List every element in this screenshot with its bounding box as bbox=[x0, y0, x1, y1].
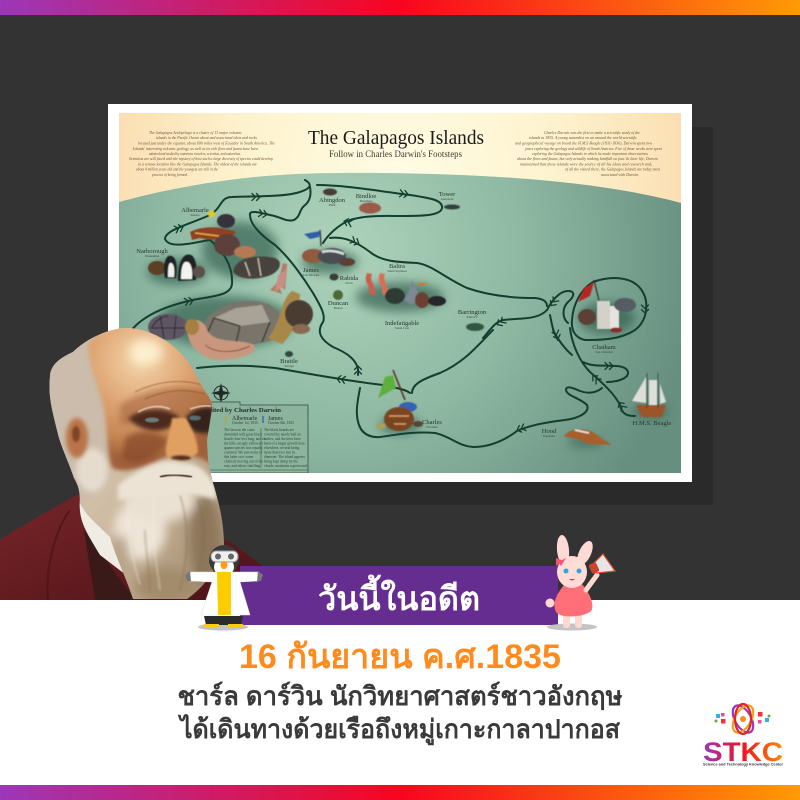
left intro paragraph bbox=[129, 130, 275, 177]
description line 2: ได้เดินทางด้วยเรือถึงหมู่เกาะกาลาปากอส bbox=[177, 713, 620, 746]
island labels: Floreana bbox=[426, 425, 438, 429]
island labels bbox=[136, 191, 671, 438]
island labels: H.M.S. Beagle bbox=[633, 420, 671, 427]
top gradient bar bbox=[0, 0, 800, 15]
island labels: Fernandina bbox=[145, 254, 160, 258]
island labels: Chatham bbox=[592, 344, 616, 351]
forehead wrinkles bbox=[135, 381, 205, 399]
right intro paragraph: about the flora and fauna, but only actually making landfall on four. In later life, Darwin bbox=[517, 156, 658, 162]
shadow bbox=[547, 624, 597, 630]
island labels: Albemarle bbox=[181, 207, 209, 214]
banner title: วันนี้ในอดีต bbox=[318, 574, 480, 617]
legend column: Albemarle bbox=[224, 416, 266, 469]
legend column: James: more than two feet in bbox=[264, 450, 295, 454]
island labels: Abingdon bbox=[319, 197, 346, 204]
shadow bbox=[198, 624, 248, 630]
animals: James island with blue flag bbox=[302, 230, 355, 266]
left intro paragraph: The Galapagos Archipelago is a cluster of 13 major volcanic bbox=[149, 130, 242, 135]
white hair bbox=[50, 334, 106, 504]
cheek shading bbox=[122, 431, 168, 462]
left intro paragraph: islands in the Pacific Ocean about and associated islets and rocks bbox=[156, 135, 257, 140]
mouth bbox=[160, 475, 192, 477]
animals: Chatham with red flag bbox=[578, 280, 636, 332]
legend column: Albemarle: this latter sort: some bbox=[224, 455, 254, 459]
arms bbox=[586, 575, 597, 590]
legend column: Albemarle: abounded with great black bbox=[224, 432, 262, 436]
island labels: Marchena bbox=[360, 199, 373, 203]
legend column: Albemarle: the hills, an ugly yellowish bbox=[224, 442, 263, 446]
legend column: Albemarle: clumsily moving out of the bbox=[224, 460, 263, 464]
island labels: Hood bbox=[542, 428, 557, 435]
hair highlight near neck bbox=[76, 448, 108, 492]
island labels: Isabela bbox=[190, 213, 200, 217]
right intro paragraph: islands in 1835. A young naturalist on an around the world scientific bbox=[529, 135, 637, 140]
eyes and brows bbox=[128, 406, 214, 434]
island labels: Rabida bbox=[340, 275, 358, 282]
animals: big tortoises, iguana and sea lion cluster bbox=[148, 263, 313, 360]
island labels: San Salvador bbox=[303, 273, 320, 277]
legend column: Albemarle: lizards four feet long, and on bbox=[224, 437, 266, 442]
beard shading bbox=[110, 492, 224, 599]
white collar bbox=[80, 498, 130, 578]
head and beard bbox=[49, 328, 224, 599]
island labels: Tower bbox=[439, 191, 456, 198]
animals: Charles turtle with green flag bbox=[376, 370, 423, 431]
purple banner bbox=[240, 566, 558, 625]
ear bbox=[66, 418, 88, 458]
date heading: 16 กันยายน ค.ศ.1835 bbox=[239, 638, 561, 676]
voyage route lines bbox=[128, 180, 646, 447]
island labels: Narborough bbox=[136, 248, 168, 255]
sea bbox=[119, 173, 681, 473]
legend column: James: The black lizards are bbox=[264, 428, 294, 432]
left intro paragraph: Scientists are still faced with the mystery of how such a large diversity of species could develop bbox=[129, 156, 273, 161]
brow shade on forehead bbox=[120, 387, 214, 425]
island soft shadows bbox=[147, 222, 668, 447]
legend column: Albemarle: Albemarle bbox=[232, 416, 258, 422]
right intro paragraph: of all the visited there, the Galapagos Islands are today most bbox=[565, 166, 661, 172]
portrait of Charles Darwin bbox=[0, 320, 262, 605]
STKC logo bbox=[703, 702, 784, 767]
legend column: Albemarle: way, and others shuffling bbox=[224, 464, 260, 469]
island labels: Espanola bbox=[543, 434, 555, 438]
penguin mascot bbox=[185, 545, 263, 630]
animals: Narborough penguins bbox=[148, 254, 205, 281]
bottom gradient bar bbox=[0, 785, 800, 800]
white lower area bbox=[0, 600, 800, 785]
logo tagline: Science and Technology Knowledge Center bbox=[703, 762, 784, 766]
island labels: Charles bbox=[422, 419, 442, 426]
island labels: Santa Fe bbox=[466, 315, 478, 319]
left intro paragraph: admired and studied by numerous travelers, scientists, and naturalists. bbox=[149, 151, 241, 157]
right intro paragraph: Charles Darwin was the first to make a scientific study of the bbox=[544, 130, 640, 135]
legend heading: Islands Visited by Charles Darwin bbox=[180, 407, 281, 414]
goggles bbox=[211, 551, 238, 562]
coat bbox=[0, 492, 262, 600]
island labels: James bbox=[303, 267, 319, 274]
animals: Albemarle lizards and tortoises bbox=[190, 210, 287, 292]
island labels: South Seymour bbox=[387, 269, 408, 273]
rabbit mascot bbox=[546, 535, 615, 630]
title: The Galapagos Islands bbox=[308, 127, 484, 149]
left intro paragraph: in a remote location like the Galapagos Islands. The oldest of the islands are bbox=[138, 162, 257, 166]
legend column: James: covered by nearly half an bbox=[264, 432, 301, 436]
mouth bbox=[569, 579, 575, 580]
legend column: James: been of a larger growth than bbox=[264, 442, 305, 446]
island labels: Tortuga bbox=[284, 364, 295, 368]
logo wordmark: STKC bbox=[703, 737, 783, 767]
island labels: Bindloe bbox=[356, 193, 376, 200]
right intro paragraph: and geographical voyage on board the H.M.S Beagle (1831-1836), Darwin spent two bbox=[515, 140, 652, 146]
legend column: Albemarle: October 1st, 1835 bbox=[232, 421, 258, 426]
legend panel bbox=[207, 402, 308, 473]
animals: small islands bbox=[285, 188, 484, 357]
subtitle: Follow in Charles Darwin's Footsteps bbox=[329, 150, 462, 160]
left intro paragraph: process of being formed. bbox=[151, 172, 188, 177]
temple hair mark bbox=[70, 375, 74, 389]
island labels: Jervis bbox=[345, 281, 353, 285]
logo pixels bbox=[714, 712, 770, 724]
pink dress bbox=[554, 584, 592, 616]
left intro paragraph: about 4 million years old and the youngest are still in the bbox=[136, 166, 218, 172]
legend column: James: diameter. The island appears bbox=[264, 455, 306, 459]
animals: Hood iguana bbox=[564, 429, 612, 445]
island labels: Brattle bbox=[280, 358, 298, 365]
legs bbox=[563, 612, 570, 628]
eyes bbox=[564, 568, 568, 574]
island labels: Santa Cruz bbox=[395, 326, 410, 330]
right intro paragraph: associated with Darwin. bbox=[601, 172, 639, 177]
island labels: Pinta bbox=[329, 203, 336, 207]
route arrows bbox=[174, 190, 649, 433]
head bbox=[557, 556, 587, 588]
waistcoat bbox=[84, 530, 135, 600]
right intro paragraph: exploring the Galapagos Islands in which he made important observations bbox=[532, 151, 648, 156]
legend column: James bbox=[263, 416, 307, 469]
island labels: Barrington bbox=[458, 309, 487, 316]
island labels: Pinzon bbox=[334, 306, 343, 310]
legend column: James: elsewhere, several being bbox=[264, 446, 299, 451]
bow bbox=[556, 558, 566, 566]
beard streaks bbox=[132, 495, 200, 590]
beard base bbox=[50, 328, 224, 599]
right intro paragraph: maintained that these islands were the source of all his ideas and research and, bbox=[520, 162, 652, 168]
beak bbox=[220, 561, 228, 569]
legend column: Albemarle: common. We saw many of bbox=[224, 450, 263, 454]
map artwork bbox=[119, 113, 681, 473]
legend column: James: James bbox=[268, 416, 283, 422]
forehead highlight bbox=[129, 339, 163, 365]
parchment sky bbox=[119, 113, 681, 203]
island labels: Indefatigable bbox=[385, 320, 419, 327]
left intro paragraph: Islands' interesting volcanic geology, as well as its rich flora and fauna have been bbox=[132, 146, 258, 152]
face skin bbox=[88, 326, 216, 470]
island labels: Baltra bbox=[389, 263, 405, 270]
icon: compass rose bbox=[211, 383, 231, 403]
island labels: Genovesa bbox=[441, 197, 454, 201]
legend column: James: October 8th, 1835 bbox=[268, 421, 294, 426]
nose bbox=[166, 418, 198, 460]
legend column: Albemarle: The lava on the coast bbox=[224, 428, 255, 432]
island labels: Duncan bbox=[328, 300, 349, 307]
head bbox=[209, 545, 239, 575]
legend column: James: clouds, maintains a green and bbox=[264, 464, 307, 469]
moustache bbox=[118, 461, 216, 500]
yellow front bbox=[217, 572, 231, 615]
icon: H.M.S. Beagle ship bbox=[632, 373, 666, 417]
animals: Baltra flamingos and herons bbox=[366, 273, 446, 308]
map poster bbox=[108, 104, 692, 482]
legend column: James: being kept damp by the bbox=[264, 460, 298, 464]
poster frame bbox=[108, 104, 692, 482]
map drop shadow panel bbox=[130, 127, 713, 505]
atom icon bbox=[729, 702, 757, 736]
ears bbox=[556, 535, 570, 565]
megaphone bbox=[588, 554, 615, 574]
dark background bbox=[0, 0, 800, 600]
feet and legs bbox=[204, 616, 243, 625]
left intro paragraph: located just under the equator, about 600 miles west of Ecuador in South America. The bbox=[138, 140, 275, 146]
lab coat bbox=[190, 572, 258, 615]
right intro paragraph bbox=[515, 130, 663, 177]
legend column: James: inches, and the trees have bbox=[264, 437, 301, 442]
hands bbox=[185, 571, 263, 581]
legend column: Albemarle: iguana species was equally bbox=[224, 446, 263, 450]
description line 1: ชาร์ล ดาร์วิน นักวิทยาศาสตร์ชาวอังกฤษ bbox=[178, 681, 622, 711]
right intro paragraph: years exploring the geology and wildlife of South America. Five of those weeks were spent bbox=[524, 146, 663, 151]
island labels: San Cristobal bbox=[595, 350, 613, 354]
